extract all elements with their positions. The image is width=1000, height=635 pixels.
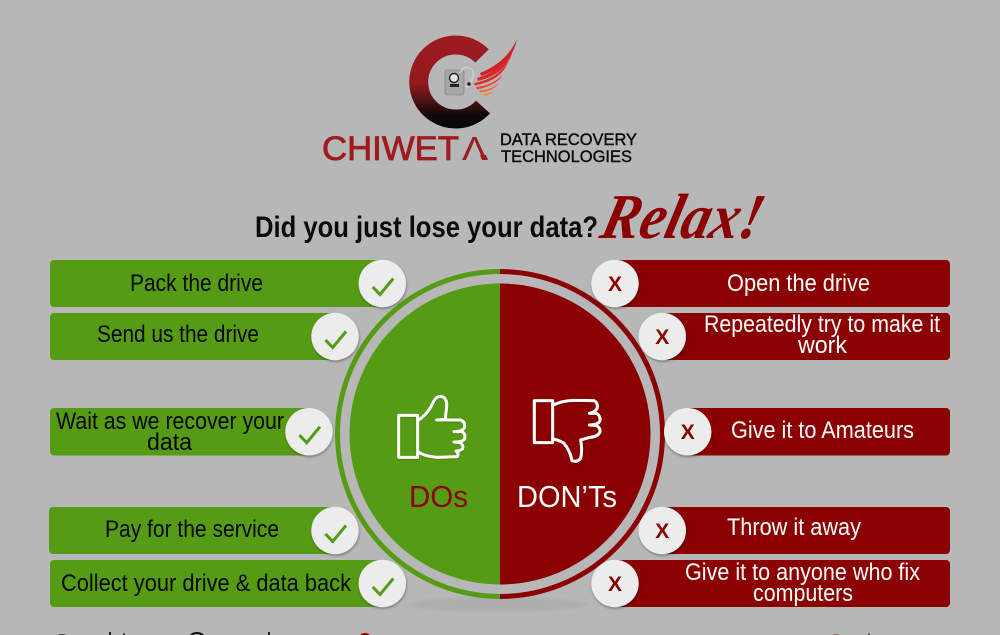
bar: pay for the service: Pay for the service <box>105 516 279 543</box>
bar: collect your drive and data back <box>50 560 385 607</box>
bar: throw it away: Throw it away <box>727 514 861 541</box>
icon: check 2 <box>311 313 359 360</box>
bar: pay for the service <box>49 507 338 554</box>
bar: repeatedly try to make it work <box>660 311 950 360</box>
bar: wait as we recover your data: Wait as we recover your <box>56 408 284 435</box>
left half disc <box>349 284 500 584</box>
icon: check 4 <box>311 507 359 554</box>
icon: x 2: X <box>655 326 669 349</box>
icon: x 4 <box>639 507 686 554</box>
icon: x 3 <box>664 408 711 455</box>
bar: throw it away <box>660 507 950 554</box>
logo <box>322 39 637 168</box>
bar: repeatedly try to make it work: Repeatedly try to make it <box>704 311 940 338</box>
icon: check 1 <box>359 260 406 307</box>
bar: open the drive: Open the drive <box>727 270 870 297</box>
logo: tagline line 1: DATA RECOVERY <box>500 130 637 149</box>
label: DON'Ts: DON’Ts <box>517 479 617 514</box>
icons: X badges <box>591 260 711 607</box>
headline script word: Relax! <box>593 182 772 253</box>
right half disc <box>500 284 650 584</box>
bar: give it to amateurs <box>685 408 950 456</box>
icon: check 5 <box>359 560 406 607</box>
logo: C ring <box>419 45 483 119</box>
icon: x 5 <box>591 560 639 607</box>
right half outer ring <box>500 272 663 596</box>
icon: x 3: X <box>681 421 695 444</box>
logo: hard drive with stethoscope <box>445 68 474 95</box>
icons: check badges <box>285 260 406 607</box>
central circle <box>338 272 663 596</box>
bar: pack the drive <box>50 260 385 307</box>
bar: send us the drive <box>50 313 338 360</box>
icon: x 5: X <box>608 573 622 596</box>
label: DOs: DOs <box>409 479 468 514</box>
panel: DON'Ts bars <box>612 260 950 607</box>
logo: wordmark accent <box>480 155 488 160</box>
bar: wait as we recover your data: data <box>147 429 193 456</box>
bar: give it to amateurs: Give it to Amateurs <box>731 417 914 444</box>
bar: send us the drive: Send us the drive <box>97 321 259 348</box>
icon: check 3 <box>285 408 333 455</box>
bar: give it to anyone who fix computers: computers <box>753 580 853 607</box>
icon: x 2 <box>639 313 686 360</box>
headline: Did you just lose your data? <box>255 211 598 244</box>
panel: DOs bars <box>49 260 385 607</box>
icon: thumbs down <box>534 400 600 461</box>
bar: repeatedly try to make it work: work <box>797 332 848 359</box>
logo: wordmark: CHIWET <box>322 130 459 168</box>
logo: wing <box>474 39 517 96</box>
bar: pack the drive: Pack the drive <box>130 270 263 297</box>
left half outer ring <box>338 272 500 596</box>
icon: x 1 <box>591 260 639 307</box>
icon: x 1: X <box>608 273 622 296</box>
bar: give it to anyone who fix computers <box>612 559 950 607</box>
bar: open the drive <box>612 260 950 307</box>
logo: tagline line 2: TECHNOLOGIES <box>501 147 632 166</box>
bar: give it to anyone who fix computers: Give it to anyone who fix <box>685 559 920 586</box>
floor shadow <box>408 597 588 612</box>
bar: collect your drive and data back: Collect your drive & data back <box>61 570 352 597</box>
icon: x 4: X <box>655 520 669 543</box>
bar: wait as we recover your data <box>50 408 312 456</box>
icon: thumbs up <box>399 396 465 457</box>
clipped bottom text fragments <box>57 632 870 635</box>
logo: wordmark A: Λ <box>462 130 487 167</box>
